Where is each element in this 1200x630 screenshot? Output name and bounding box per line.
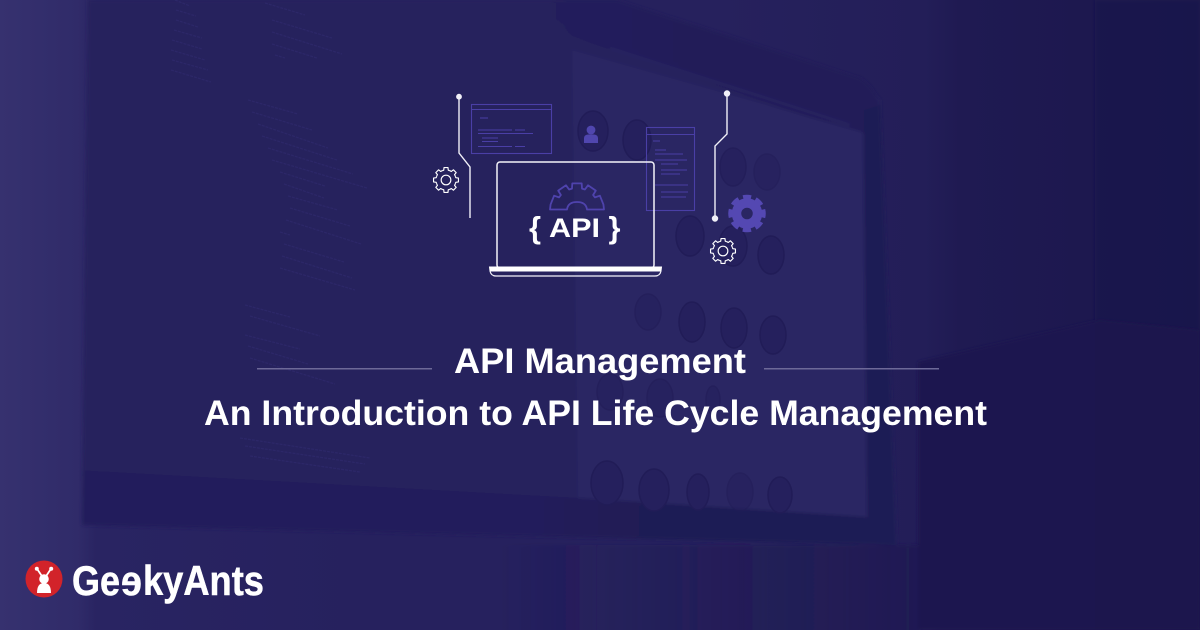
title row: API Management — [454, 342, 746, 381]
right bezel — [864, 105, 896, 545]
laptop base — [490, 267, 662, 276]
icon: gear left — [434, 168, 458, 192]
monitor body — [82, 0, 897, 545]
wordmark: Ge — [72, 557, 120, 604]
API label: { — [529, 210, 541, 245]
icon: ant — [26, 560, 62, 598]
wordmark — [72, 557, 264, 604]
API label: API — [549, 213, 600, 243]
top bezel — [540, 0, 880, 135]
right code window — [646, 128, 694, 210]
illustration: API laptop — [434, 91, 764, 276]
code lines — [171, 0, 370, 472]
laptop screen — [497, 162, 654, 268]
left code window — [472, 104, 552, 154]
right circuit line — [712, 91, 730, 221]
left circuit line — [457, 94, 470, 218]
icon: filled gear — [730, 197, 764, 230]
icon: gear bottom right — [711, 239, 735, 263]
API label — [529, 210, 620, 245]
wordmark: e — [121, 557, 142, 604]
website logo icons on screen — [578, 111, 792, 513]
half gear icon — [550, 183, 604, 210]
desk box right — [918, 320, 1200, 630]
API label: } — [608, 210, 620, 245]
bottom bezel — [82, 470, 897, 545]
wordmark: kyAnts — [143, 557, 264, 604]
gap beside screen — [558, 40, 578, 498]
subtitle: An Introduction to API Life Cycle Management — [204, 394, 987, 433]
monitor screen — [572, 50, 866, 517]
floor shade — [500, 545, 920, 630]
icon: user — [584, 126, 598, 143]
logo: GeekyAnts — [26, 557, 264, 604]
